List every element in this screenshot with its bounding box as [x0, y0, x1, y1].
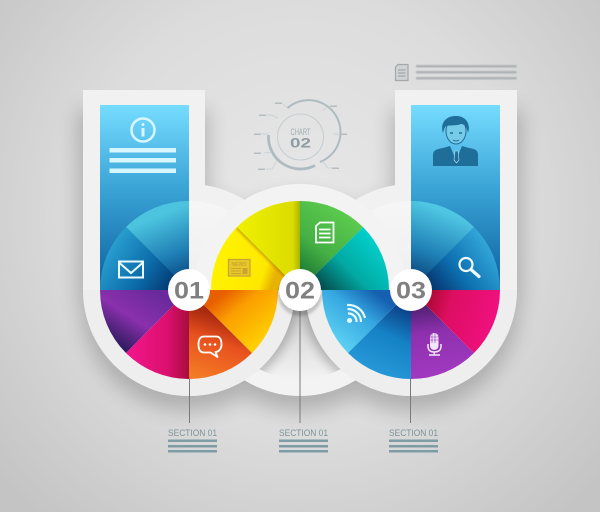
icon: speech bubble: [198, 336, 222, 357]
right blue column: [411, 105, 500, 290]
section 01 label: SECTION 01: [168, 428, 217, 439]
section 03 label: SECTION 01: [389, 428, 438, 439]
section 01 label: [168, 428, 217, 452]
text lines: left column: [110, 148, 176, 173]
section 03 label: [389, 428, 438, 452]
chart 02 emblem: CHART: [290, 127, 311, 138]
icon: envelope: [119, 262, 143, 278]
chart 02 emblem: [254, 100, 347, 170]
panel: white U frame: [83, 90, 517, 396]
pie 02: [211, 201, 389, 290]
center ring: [194, 184, 406, 396]
icon: info: [132, 118, 154, 142]
icon: wifi: [347, 305, 365, 323]
icon: newspaper: NEWS: [232, 262, 247, 268]
pie 03: [322, 201, 500, 379]
icon: newspaper: [228, 260, 250, 276]
panel shadow: [78, 110, 522, 411]
left blue column: [100, 105, 189, 290]
icon: microphone: [428, 333, 441, 355]
section 02 label: [279, 428, 328, 452]
icon: magnifier: [460, 258, 479, 276]
badge shadow: [278, 272, 322, 316]
icon: document: [316, 222, 334, 242]
number badges: [168, 269, 432, 311]
pie 01: [100, 201, 278, 379]
center disc lower half: [211, 290, 389, 379]
lower ring overlaps: [83, 290, 517, 396]
number badges: 02: [285, 278, 315, 304]
section 02 label: SECTION 01: [279, 428, 328, 439]
number badges: 03: [396, 278, 426, 304]
chart 02 emblem: 02: [290, 134, 311, 150]
icon: header document: [396, 64, 408, 80]
inner discs behind the first and third pies: [100, 201, 500, 379]
number badges: 01: [174, 278, 204, 304]
ring shadows on center disc: [260, 310, 340, 373]
icon: businessman: [433, 116, 478, 166]
connector lines: [190, 311, 410, 423]
header text lines: [416, 65, 516, 80]
